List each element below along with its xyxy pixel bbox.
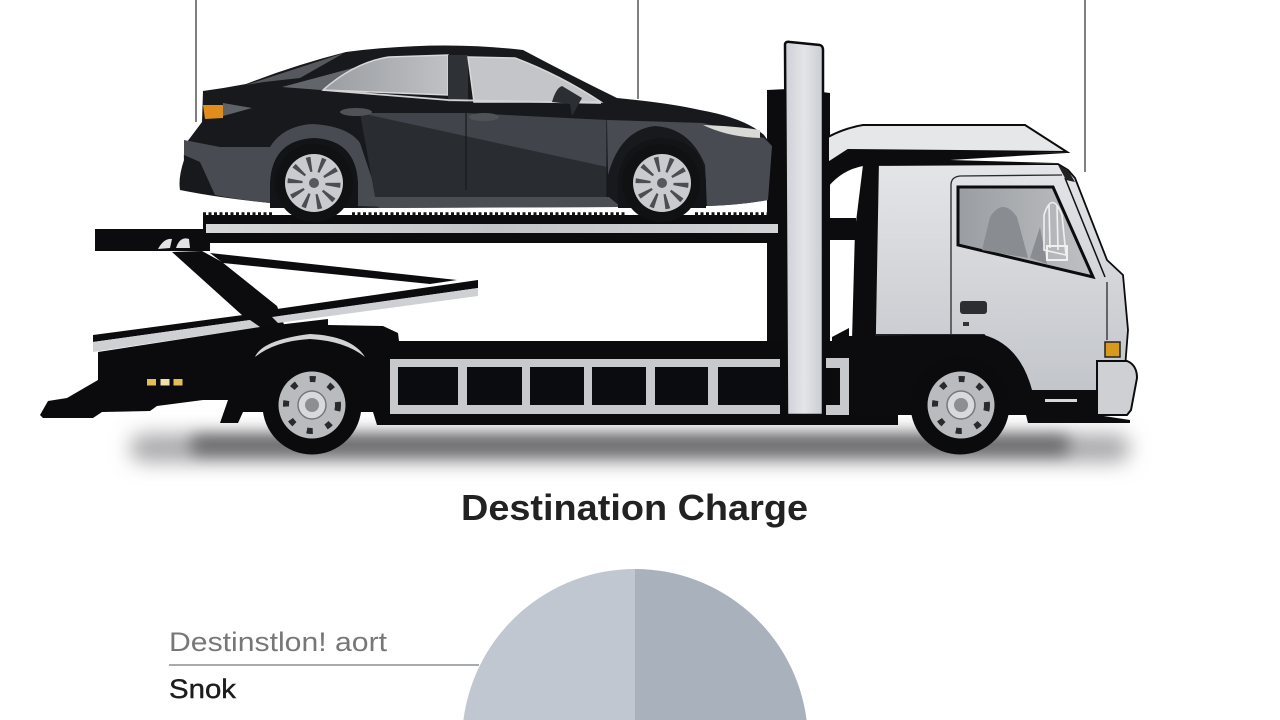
front truck wheel (910, 356, 1010, 454)
cab body (875, 164, 1128, 392)
door handles (340, 108, 499, 121)
cab lower black and arch (832, 328, 1130, 423)
door pillar (448, 55, 468, 102)
tail light (203, 105, 223, 119)
rear chassis body (40, 319, 898, 425)
door lower panel (360, 113, 607, 197)
rear bumper and arch panel (184, 124, 385, 207)
front car wheel (622, 144, 700, 222)
car body silhouette (180, 45, 772, 208)
flatbed carrier truck (40, 42, 1137, 454)
sill (364, 197, 621, 208)
front fender (607, 120, 772, 206)
chart label: destination: Destinstlon! aort (169, 627, 388, 657)
front side frame piece (826, 358, 849, 415)
ground shadow (130, 434, 1130, 462)
pie chart (463, 569, 807, 720)
rear quarter glass (282, 65, 364, 90)
chart label: short: Snok (169, 674, 237, 704)
rear window (323, 55, 448, 95)
front window (468, 57, 601, 102)
upper deck platform (95, 214, 778, 251)
central mast (785, 42, 823, 415)
heading: Destination Charge (461, 487, 808, 528)
door upper highlight (360, 113, 607, 167)
rear truck wheel (262, 356, 362, 454)
tail marker lights (147, 379, 182, 386)
roof highlight (246, 53, 344, 85)
rear folding ramp and supports (93, 238, 478, 352)
callout leader lines (196, 0, 1085, 172)
front amber marker (1105, 342, 1120, 357)
step highlight (1045, 399, 1077, 402)
sedan car (180, 45, 772, 222)
cab black structure (828, 150, 1067, 340)
central mast back columns (767, 89, 830, 345)
tail light lens (223, 103, 252, 116)
front bumper (1097, 361, 1137, 415)
wheel arch highlight (255, 334, 365, 357)
belt line trim (323, 90, 601, 103)
chart leader line (169, 664, 479, 666)
wheel wells (270, 138, 706, 208)
rear car wheel (275, 144, 353, 222)
headlight (703, 125, 760, 138)
door seam (466, 113, 607, 197)
roof fairing (828, 125, 1067, 163)
cab door and window (951, 165, 1107, 340)
side mirror (552, 86, 582, 116)
ladder side frame (390, 359, 780, 414)
